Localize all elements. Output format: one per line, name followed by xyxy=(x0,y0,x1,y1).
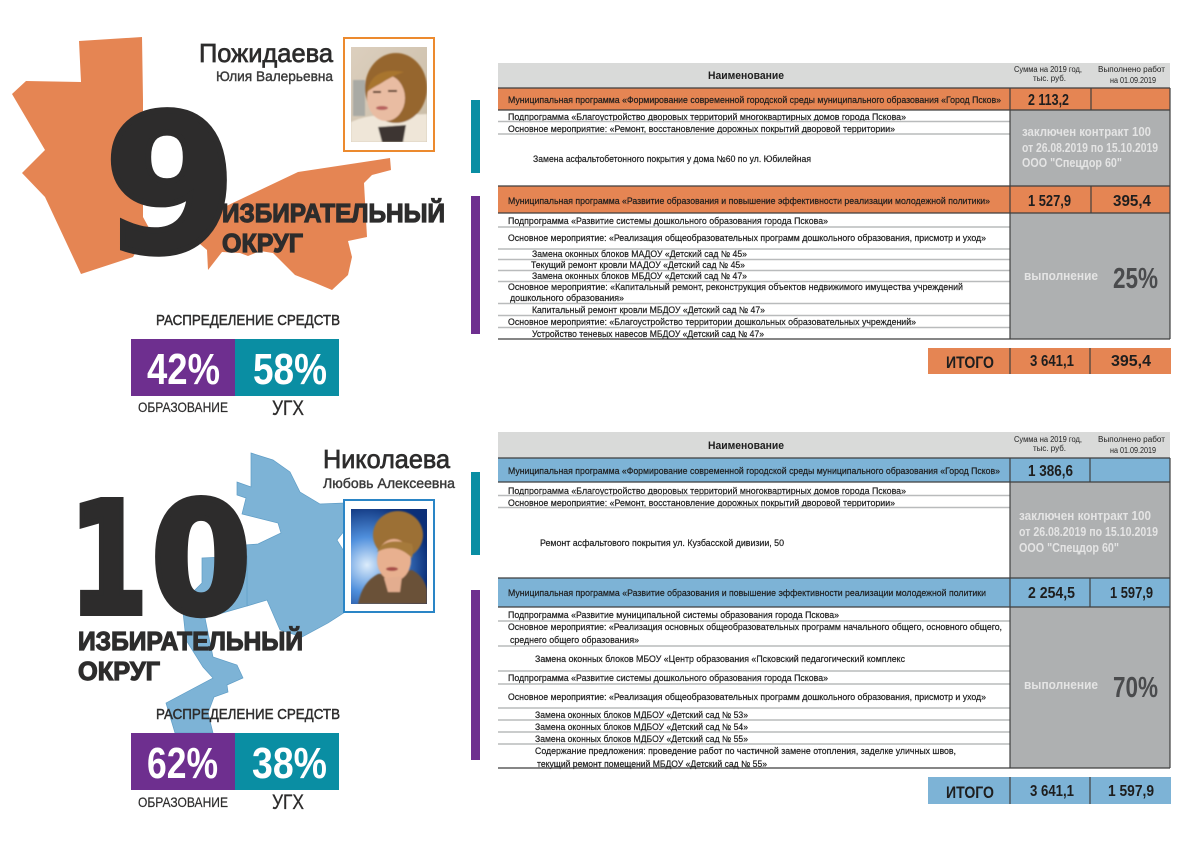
activity rows: education: Основное мероприятие: «Благоустройство территории дошкольных образовательных учреждений» xyxy=(508,317,916,327)
activity rows: education: Замена оконных блоков МБДОУ «Детский сад № 47» xyxy=(532,271,747,281)
stat: utilities 58%: УГХ xyxy=(272,397,304,420)
table header: Сумма на 2019 год, xyxy=(1014,435,1082,444)
programme row: urban environment: 1 386,6 xyxy=(1028,463,1073,480)
funds distribution title: РАСПРЕДЕЛЕНИЕ СРЕДСТВ xyxy=(156,312,340,329)
table header: тыс. руб. xyxy=(1033,444,1066,453)
stat: utilities 58%: 58% xyxy=(253,345,327,394)
activity rows: education: Основное мероприятие: «Реализация общеобразовательных программ дошкольного образования, присмотр и уход» xyxy=(508,233,986,243)
programme row: education: 1 527,9 xyxy=(1028,193,1071,210)
activity rows: urban environment xyxy=(498,112,1010,164)
totals row: 395,4 xyxy=(1111,353,1151,370)
deputy name xyxy=(199,38,334,84)
heading: district label: ОКРУГ xyxy=(78,656,160,686)
activity rows: urban environment xyxy=(498,486,1010,548)
deputy name: Любовь Алексеевна xyxy=(323,475,455,491)
totals row: ИТОГО xyxy=(946,783,994,802)
table rules xyxy=(498,88,1170,339)
table header: Сумма на 2019 год, xyxy=(1014,65,1082,74)
status cell: contract xyxy=(1010,482,1170,578)
activity rows: education: Устройство теневых навесов МБДОУ «Детский сад № 47» xyxy=(532,329,764,339)
stat: education 62%: 62% xyxy=(147,739,218,788)
heading: district label: ОКРУГ xyxy=(222,228,303,258)
table header: Выполнено работ xyxy=(1098,435,1165,444)
panel: district 9 accent bars xyxy=(471,100,480,334)
programme row: urban environment: Муниципальная программа «Формирование современной городской среды муниципального образования «Город Псков» xyxy=(508,466,1000,476)
table header: на 01.09.2019 xyxy=(1110,76,1156,85)
activity rows: education: Основное мероприятие: «Капитальный ремонт, реконструкция объектов недвижимого имущества учреждений xyxy=(508,282,963,292)
stat: utilities 38% xyxy=(235,733,339,814)
programme row: urban environment xyxy=(498,458,1170,482)
activity rows: urban environment: Замена асфальтобетонного покрытия у дома №60 по ул. Юбилейная xyxy=(533,154,811,164)
activity rows: education: Текущий ремонт кровли МАДОУ «Детский сад № 45» xyxy=(531,260,745,270)
status cell: contract: ООО "Спецдор 60" xyxy=(1019,541,1119,555)
status cell: contract: от 26.08.2019 по 15.10.2019 xyxy=(1022,141,1158,155)
activity rows: education: Замена оконных блоков МДБОУ «Детский сад № 53» xyxy=(535,710,748,720)
programme row: education xyxy=(498,578,1170,607)
activity rows: education: Основное мероприятие: «Реализация общеобразовательных программ дошкольного образования, присмотр и уход» xyxy=(508,692,986,702)
status cell: contract: заключен контракт 100 xyxy=(1019,509,1151,523)
programme row: education: 395,4 xyxy=(1113,193,1151,210)
portrait: Nikolaeva xyxy=(344,500,434,612)
programme row: urban environment: 2 113,2 xyxy=(1028,92,1069,109)
table: district 9 budget xyxy=(498,63,1171,374)
status cell: contract: от 26.08.2019 по 15.10.2019 xyxy=(1019,525,1158,539)
programme row: urban environment xyxy=(498,88,1170,110)
activity rows: education: Содержание предложения: проведение работ по частичной замене отопления, заделке уличных швов, xyxy=(535,746,956,756)
activity rows: education: дошкольного образования» xyxy=(510,293,624,303)
status cell: progress 70%: 70% xyxy=(1113,672,1158,704)
status cell: progress 70%: выполнение xyxy=(1024,678,1098,692)
totals row: 1 597,9 xyxy=(1108,783,1154,800)
activity rows: education: Подпрограмма «Развитие системы дошкольного образования города Пскова» xyxy=(508,216,828,226)
activity rows: education: Замена оконных блоков МАДОУ «Детский сад № 45» xyxy=(532,249,747,259)
activity rows: urban environment: Подпрограмма «Благоустройство дворовых территорий многоквартирных домов города Пскова» xyxy=(508,486,906,496)
table header: Наименование xyxy=(708,440,784,452)
table header: Наименование xyxy=(708,70,784,82)
table header xyxy=(498,432,1170,458)
deputy name: Пожидаева xyxy=(199,38,334,68)
activity rows: education: Замена оконных блоков МБОУ «Центр образования «Псковский педагогический комплекс xyxy=(535,654,905,664)
activity rows: education: Замена оконных блоков МДБОУ «Детский сад № 54» xyxy=(535,722,748,732)
totals row xyxy=(928,348,1171,374)
activity rows: urban environment: Подпрограмма «Благоустройство дворовых территорий многоквартирных домов города Пскова» xyxy=(508,112,906,122)
activity rows: education xyxy=(498,216,1010,339)
status cell: progress 25% xyxy=(1010,213,1170,339)
programme row: urban environment: Муниципальная программа «Формирование современной городской среды муниципального образования «Город Псков» xyxy=(508,95,1001,105)
programme row: education xyxy=(498,186,1170,213)
programme row: education: 2 254,5 xyxy=(1028,585,1075,602)
table rules xyxy=(498,458,1170,768)
heading: district label xyxy=(222,198,445,258)
activity rows: education: Основное мероприятие: «Реализация основных общеобразовательных программ начального общего, основного общего, xyxy=(508,622,1002,632)
panel: district 9 xyxy=(12,37,445,420)
numeral 10: 1 xyxy=(69,469,148,650)
activity rows: education xyxy=(498,610,1010,769)
totals row: 3 641,1 xyxy=(1030,353,1074,370)
activity rows: education: Замена оконных блоков МДБОУ «Детский сад № 55» xyxy=(535,734,748,744)
programme row: education: Муниципальная программа «Развитие образования и повышение эффективности реализации молодежной политики» xyxy=(508,196,990,206)
panel: district 10 xyxy=(69,444,455,814)
table header: Выполнено работ xyxy=(1098,65,1165,74)
numeral 10 xyxy=(69,469,251,650)
activity rows: education: текущий ремонт помещений МБДОУ «Детский сад № 55» xyxy=(537,759,767,769)
stat: education 42%: 42% xyxy=(147,345,220,394)
status cell: progress 70% xyxy=(1010,607,1170,768)
programme row: education: Муниципальная программа «Развитие образования и повышение эффективности реализации молодежной политики xyxy=(508,588,986,598)
activity rows: education: среднего общего образования» xyxy=(510,635,639,645)
activity rows: urban environment: Основное мероприятие: «Ремонт, восстановление дорожных покрытий дворовой территории» xyxy=(508,124,895,134)
deputy name: Юлия Валерьевна xyxy=(216,68,333,84)
portrait: Pozhidaeva xyxy=(344,38,434,151)
funds distribution title: РАСПРЕДЕЛЕНИЕ СРЕДСТВ xyxy=(156,706,340,723)
stat: education 62%: ОБРАЗОВАНИЕ xyxy=(138,794,228,810)
heading: district label: ИЗБИРАТЕЛЬНЫЙ xyxy=(78,626,303,656)
deputy name xyxy=(323,444,455,491)
map: district 9 shape xyxy=(12,37,391,290)
status cell: contract: ООО "Спецдор 60" xyxy=(1022,156,1122,170)
table header: на 01.09.2019 xyxy=(1110,446,1156,455)
numeral 9: 9 xyxy=(104,75,236,296)
stat: education 42% xyxy=(131,339,235,415)
status cell: progress 25%: 25% xyxy=(1113,263,1158,295)
activity rows: education: Подпрограмма «Развитие системы дошкольного образования города Пскова» xyxy=(508,673,828,683)
heading: district label: ИЗБИРАТЕЛЬНЫЙ xyxy=(222,198,445,228)
heading: district label xyxy=(78,626,303,686)
map: district 10 shape xyxy=(166,453,345,733)
status cell: contract xyxy=(1010,110,1170,186)
deputy name: Николаева xyxy=(323,444,451,474)
activity rows: urban environment: Основное мероприятие: «Ремонт, восстановление дорожных покрытий дворовой территории» xyxy=(508,498,895,508)
status cell: progress 25%: выполнение xyxy=(1024,269,1098,283)
numeral 10: 0 xyxy=(151,469,251,650)
activity rows: education: Подпрограмма «Развитие муниципальной системы образования города Пскова» xyxy=(508,610,839,620)
status cell: contract: заключен контракт 100 xyxy=(1022,125,1151,139)
programme row: education: 1 597,9 xyxy=(1110,585,1153,602)
activity rows: education: Капитальный ремонт кровли МБДОУ «Детский сад № 47» xyxy=(532,305,765,315)
totals row: 3 641,1 xyxy=(1030,783,1074,800)
totals row xyxy=(928,777,1171,804)
table header xyxy=(498,63,1170,88)
table header: тыс. руб. xyxy=(1033,74,1066,83)
stat: utilities 58% xyxy=(235,339,339,420)
panel: district 10 accent bars xyxy=(471,472,480,760)
stat: utilities 38%: 38% xyxy=(252,739,327,788)
table: district 10 budget xyxy=(498,432,1171,804)
stat: education 42%: ОБРАЗОВАНИЕ xyxy=(138,399,228,415)
activity rows: urban environment: Ремонт асфальтового покрытия ул. Кузбасской дивизии, 50 xyxy=(540,538,784,548)
stat: education 62% xyxy=(131,733,235,810)
totals row: ИТОГО xyxy=(946,353,994,372)
stat: utilities 38%: УГХ xyxy=(272,791,304,814)
